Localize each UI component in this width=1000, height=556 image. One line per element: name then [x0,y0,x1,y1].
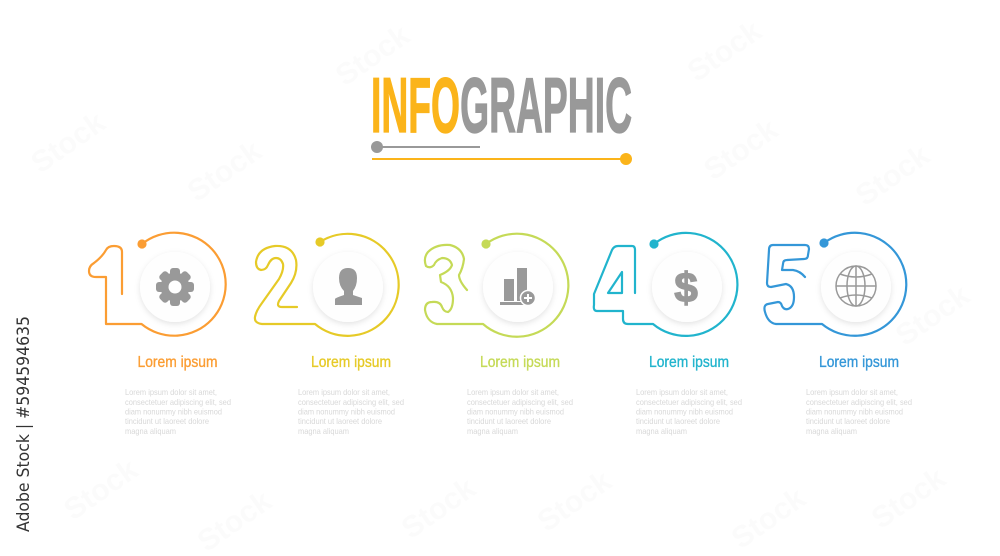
step 2 [255,234,404,436]
heading 3: Lorem ipsum [480,354,560,371]
numeral 5 and ring [764,233,906,336]
text: Stock [330,19,416,93]
text block 4: consectetuer adipiscing elit, sed [636,397,742,407]
text block 1: consectetuer adipiscing elit, sed [125,397,231,407]
inner disc 1 [140,252,210,322]
text block 5: consectetuer adipiscing elit, sed [806,397,912,407]
text block 4: Lorem ipsum dolor sit amet, [636,387,728,397]
heading 2: Lorem ipsum [311,354,391,371]
text block 1: diam nonummy nibh euismod [125,406,222,416]
text: Stock [698,113,784,187]
icon: globe [836,266,876,306]
step 1 [89,233,231,436]
text block 4 [636,387,742,436]
step 5 [764,233,912,436]
text: Stock [532,464,618,538]
text: Stock [25,106,111,180]
text block 2: consectetuer adipiscing elit, sed [298,397,404,407]
text block 2: Lorem ipsum dolor sit amet, [298,387,390,397]
icon: bar chart with plus [500,268,536,306]
text block 5: Lorem ipsum dolor sit amet, [806,387,898,397]
title underline: grey [371,141,480,153]
numeral 3 and ring [425,234,568,337]
text block 5 [806,387,912,436]
text block 3: Lorem ipsum dolor sit amet, [467,387,559,397]
text block 3: tincidunt ut laoreet dolore [467,416,551,426]
text: Stock [682,14,768,88]
text block 4: tincidunt ut laoreet dolore [636,416,720,426]
inner disc 2 [313,252,383,322]
inner disc 3 [483,252,553,322]
heading 5: Lorem ipsum [819,354,899,371]
text block 2: magna aliquam [298,426,349,436]
text block 3: consectetuer adipiscing elit, sed [467,397,573,407]
text block 2: tincidunt ut laoreet dolore [298,416,382,426]
text: Stock [866,461,952,535]
text block 5: tincidunt ut laoreet dolore [806,416,890,426]
text block 5: magna aliquam [806,426,857,436]
heading 1: Lorem ipsum [138,354,218,371]
text block 3: diam nonummy nibh euismod [467,406,564,416]
step 4 [594,233,742,436]
text block 5: diam nonummy nibh euismod [806,406,903,416]
text block 1: tincidunt ut laoreet dolore [125,416,209,426]
text block 1 [125,387,231,436]
text block 2 [298,387,404,436]
inner disc 5 [821,252,891,322]
title: INFOGRAPHIC [371,61,632,149]
text block 4: diam nonummy nibh euismod [636,406,733,416]
text: Stock [58,453,144,527]
icon: dollar sign: $ [674,264,698,311]
numeral 2 and ring [255,234,399,336]
text: Stock [396,471,482,545]
inner disc 4 [652,252,722,322]
side credit: Adobe Stock | #594594635 [14,316,33,532]
numeral 1 and ring [89,233,226,336]
numeral 4 and ring [594,233,737,336]
text block 2: diam nonummy nibh euismod [298,406,395,416]
text block 4: magna aliquam [636,426,687,436]
text block 1: Lorem ipsum dolor sit amet, [125,387,217,397]
text: Stock [182,134,268,208]
text block 3: magna aliquam [467,426,518,436]
title underline: yellow [372,153,632,165]
heading 4: Lorem ipsum [649,354,729,371]
text: Stock [726,481,812,555]
text: Stock [850,139,936,213]
text: Stock [890,279,976,353]
step 3 [425,234,573,436]
icon: gear [156,268,194,306]
icon: person [335,268,362,305]
text block 1: magna aliquam [125,426,176,436]
text block 3 [467,387,573,436]
